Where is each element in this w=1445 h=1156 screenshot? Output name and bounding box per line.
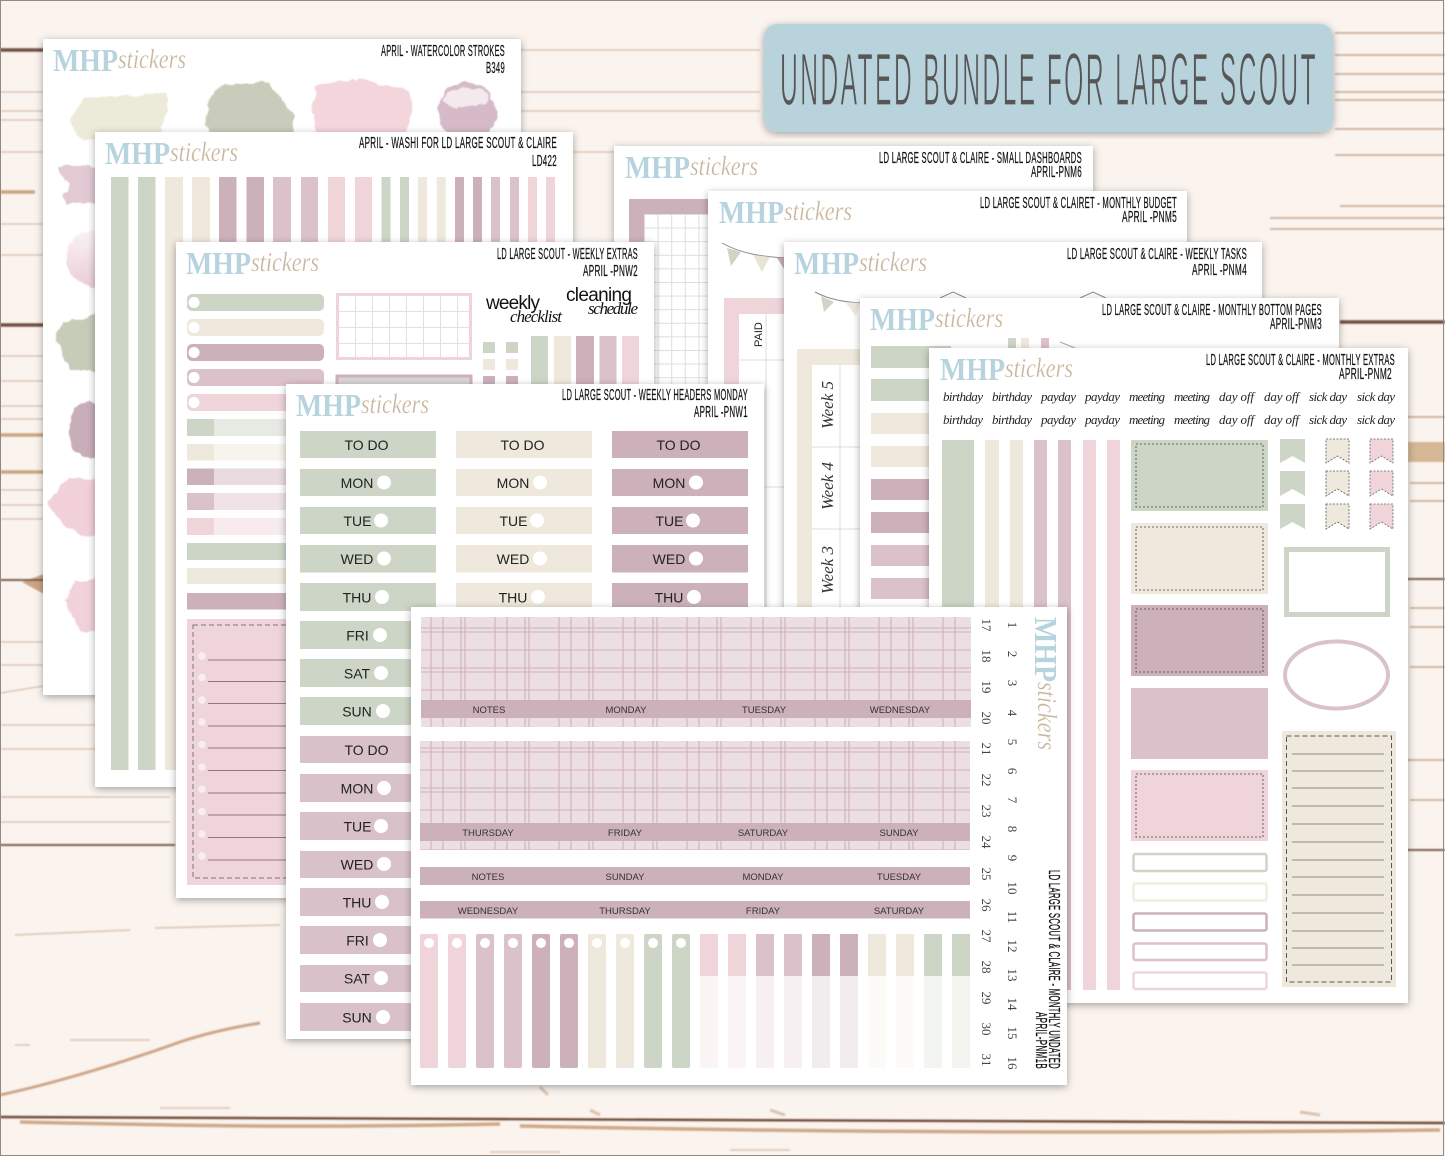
PAID label: PAID xyxy=(753,322,765,347)
mauve header column: MON xyxy=(653,475,685,491)
mauve header column: THU xyxy=(655,590,683,606)
logo: MHP stickers: stickers xyxy=(251,247,319,277)
sage and mauve header column: MON xyxy=(341,475,373,491)
sage and mauve header column: SUN xyxy=(342,704,372,720)
date numbers 17 to 31: 20 xyxy=(979,712,994,724)
date numbers 17 to 31: 24 xyxy=(979,836,994,849)
logo: MHP stickers: stickers xyxy=(935,303,1003,333)
sage and mauve header column: WED xyxy=(341,856,373,872)
dashboard grid xyxy=(629,199,1029,789)
plaid panel 2 with headers: SATURDAY xyxy=(738,828,789,839)
sheet title xyxy=(879,150,1082,181)
weekly checklist label: checklist xyxy=(510,307,563,326)
date numbers 17 to 31: 17 xyxy=(979,618,994,632)
logo: MHP stickers xyxy=(940,351,1073,387)
word stickers: payday xyxy=(1084,389,1120,404)
date numbers 17 to 31: 21 xyxy=(979,742,994,756)
date numbers 1 to 16: 4 xyxy=(1005,710,1020,717)
logo: MHP stickers: stickers xyxy=(859,247,927,277)
bunting banner xyxy=(815,292,1106,316)
cleaning schedule label xyxy=(566,285,638,318)
sheet: April watercolor strokes xyxy=(43,39,521,695)
mauve header column: WED xyxy=(653,551,685,567)
logo: MHP stickers: MHP xyxy=(719,194,784,230)
logo: MHP stickers: stickers xyxy=(118,44,186,74)
logo: MHP stickers xyxy=(794,245,927,281)
word stickers: birthday xyxy=(992,412,1032,427)
plaid panel 2 with headers: THURSDAY xyxy=(462,828,514,839)
header strip: notes to tuesday: MONDAY xyxy=(742,872,784,883)
sheet title xyxy=(562,387,748,421)
logo: MHP stickers xyxy=(296,387,429,423)
sage and mauve header column: TO DO xyxy=(344,437,389,453)
date numbers 1 to 16: 5 xyxy=(1005,739,1020,745)
tiny squares xyxy=(483,342,518,387)
cream header column: THU xyxy=(499,590,527,606)
sage and mauve header column: FRI xyxy=(346,932,369,948)
weekly checklist label xyxy=(485,293,563,326)
sage and mauve header column: THU xyxy=(343,894,371,910)
header strip: wednesday to saturday: FRIDAY xyxy=(746,906,781,917)
word stickers: payday xyxy=(1084,412,1120,427)
date numbers 1 to 16: 7 xyxy=(1005,797,1020,804)
sheet: April watercolor strokes: B349 xyxy=(486,60,505,77)
bookmark strips with holes xyxy=(420,934,690,1068)
logo: MHP stickers: MHP xyxy=(625,149,690,185)
date numbers 17 to 31: 28 xyxy=(979,960,994,974)
sage and mauve header column: TUE xyxy=(344,513,372,529)
watercolor blobs xyxy=(50,81,496,631)
sheet: monthly extras xyxy=(929,348,1408,1003)
logo: MHP stickers: MHP xyxy=(870,301,935,337)
plaid panel 2 with headers: SUNDAY xyxy=(880,828,919,839)
sheet: weekly tasks xyxy=(784,242,1262,897)
two-tone bars xyxy=(187,419,307,535)
sheet: April watercolor strokes: APRIL - WATERCOLOR STROKES xyxy=(381,43,505,60)
sheet: washi for LD large scout xyxy=(95,132,573,787)
logo: MHP stickers, rotated: stickers xyxy=(1032,682,1062,750)
cream header column: MON xyxy=(497,475,529,491)
cleaning schedule label: cleaning xyxy=(566,285,632,306)
sheet: weekly tasks: LD LARGE SCOUT & CLAIRE - WEEKLY TASKS xyxy=(1067,246,1247,263)
sage and mauve header column: WED xyxy=(341,551,373,567)
sage and mauve header column: SAT xyxy=(344,970,371,986)
sage and mauve header column: SUN xyxy=(342,1010,372,1026)
week table xyxy=(797,349,1217,879)
mauve box xyxy=(337,376,471,406)
cream header column xyxy=(456,431,592,611)
date numbers 17 to 31: 31 xyxy=(979,1054,994,1066)
date numbers 1 to 16: 15 xyxy=(1005,1026,1020,1040)
header strip: notes to tuesday xyxy=(420,867,970,885)
sheet title xyxy=(1102,302,1322,333)
logo: MHP stickers: stickers xyxy=(361,389,429,419)
sheet title xyxy=(359,135,557,170)
sheet: small dashboards: APRIL-PNM6 xyxy=(1031,164,1082,181)
logo: MHP stickers: stickers xyxy=(170,137,238,167)
sheet: monthly budget: LD LARGE SCOUT & CLAIRET - MONTHLY BUDGET xyxy=(980,195,1177,212)
sheet: weekly extras: LD LARGE SCOUT - WEEKLY EXTRAS xyxy=(497,246,638,263)
week labels: Week 5 xyxy=(818,381,837,429)
plaid panel 1 with headers: TUESDAY xyxy=(742,705,787,716)
date numbers 1 to 16: 11 xyxy=(1005,911,1020,923)
date numbers 1 to 16: 8 xyxy=(1005,826,1020,832)
sheet: monthly undated xyxy=(411,607,1067,1085)
date numbers 17 to 31: 22 xyxy=(979,774,994,786)
word stickers: meeting xyxy=(1174,412,1210,427)
plaid panel 2 with headers xyxy=(420,741,970,850)
outlined label strips xyxy=(1134,854,1266,989)
logo: MHP stickers: stickers xyxy=(784,196,852,226)
word stickers: birthday xyxy=(943,389,983,404)
header strip: wednesday to saturday: SATURDAY xyxy=(874,906,925,917)
pink grid box xyxy=(338,294,470,358)
lined note block xyxy=(1282,731,1396,987)
date numbers 1 to 16: 13 xyxy=(1005,968,1020,982)
rounded check bars xyxy=(187,294,324,411)
vertical strips xyxy=(942,440,1120,990)
logo: MHP stickers: MHP xyxy=(296,387,361,423)
two-tone tab strips xyxy=(700,934,970,1068)
date numbers 17 to 31: 18 xyxy=(979,650,994,662)
sheet: small dashboards xyxy=(614,146,1093,801)
date numbers 17 to 31: 27 xyxy=(979,930,994,943)
word stickers: birthday xyxy=(992,389,1032,404)
short strips xyxy=(531,336,639,396)
plaid panel 1 with headers: NOTES xyxy=(473,705,505,716)
logo: MHP stickers, rotated: MHP xyxy=(1028,617,1064,682)
word stickers: sick day xyxy=(1309,412,1347,427)
date numbers 17 to 31: 30 xyxy=(979,1022,994,1036)
date numbers 17 to 31: 29 xyxy=(979,992,994,1004)
oval frame xyxy=(1285,642,1388,708)
sheet title: APRIL -PNW2 xyxy=(583,263,638,280)
sheet: small dashboards: LD LARGE SCOUT & CLAIRE - SMALL DASHBOARDS xyxy=(879,150,1082,167)
sage and mauve header column: TO DO xyxy=(344,742,389,758)
date numbers 1 to 16: 10 xyxy=(1005,882,1020,894)
logo: MHP stickers xyxy=(186,245,319,281)
large blocks with stitched borders xyxy=(1131,440,1268,841)
logo: MHP stickers xyxy=(719,194,852,230)
sage and mauve header column: SAT xyxy=(344,666,371,682)
date numbers 1 to 16: 9 xyxy=(1005,855,1020,861)
logo: MHP stickers: stickers xyxy=(1005,353,1073,383)
sheet: weekly headers monday: LD LARGE SCOUT - WEEKLY HEADERS MONDAY xyxy=(562,387,748,404)
cream header column: TUE xyxy=(500,513,528,529)
sage and mauve header column: TUE xyxy=(344,818,372,834)
logo: MHP stickers: MHP xyxy=(794,245,859,281)
header strip: wednesday to saturday: THURSDAY xyxy=(599,906,651,917)
flag stickers xyxy=(1280,439,1393,529)
sage and mauve header column: MON xyxy=(341,780,373,796)
sheet title xyxy=(497,246,638,280)
mauve header column: TUE xyxy=(656,513,684,529)
logo: MHP stickers, rotated xyxy=(1028,617,1064,750)
cream header column: WED xyxy=(497,551,529,567)
date numbers 1 to 16: 12 xyxy=(1005,940,1020,952)
header strip: wednesday to saturday xyxy=(420,901,970,918)
sage and mauve header column: THU xyxy=(343,590,371,606)
sheet title: APRIL - WASHI FOR LD LARGE SCOUT & CLAIRE xyxy=(359,135,557,152)
date numbers 17 to 31: 25 xyxy=(979,868,994,880)
logo: MHP stickers xyxy=(53,42,186,78)
header strip: notes to tuesday: SUNDAY xyxy=(606,872,645,883)
sage and mauve header column: FRI xyxy=(346,628,369,644)
cleaning schedule label: schedule xyxy=(588,299,638,318)
sheet: weekly headers monday xyxy=(286,384,764,1039)
logo: MHP stickers xyxy=(625,149,758,185)
sheet: monthly bottom pages xyxy=(860,298,1339,953)
sheet title, rotated xyxy=(1032,870,1062,1069)
word stickers: payday xyxy=(1040,412,1076,427)
plaid panel 1 with headers: MONDAY xyxy=(606,705,647,716)
solid bars xyxy=(187,543,307,610)
logo: MHP stickers: stickers xyxy=(690,151,758,181)
mauve header column xyxy=(612,431,748,611)
word stickers: birthday xyxy=(943,412,983,427)
word stickers: meeting xyxy=(1129,412,1166,427)
sheet title xyxy=(980,195,1177,226)
sage frame xyxy=(1286,550,1388,614)
budget table xyxy=(724,298,1144,818)
pink lined checklist block xyxy=(187,619,324,885)
logo: MHP stickers xyxy=(870,301,1003,337)
word stickers: day off xyxy=(1264,389,1301,404)
date numbers 17 to 31: 26 xyxy=(979,898,994,912)
date numbers 17 to 31: 19 xyxy=(979,680,994,694)
sheet title xyxy=(1206,352,1395,383)
date numbers 1 to 16: 6 xyxy=(1005,768,1020,775)
title banner xyxy=(764,24,1333,132)
plaid panel 1 with headers xyxy=(421,617,971,727)
sheet: weekly headers monday: APRIL -PNW1 xyxy=(694,404,748,421)
sheet title xyxy=(381,43,505,77)
sheet title xyxy=(1067,246,1247,279)
sheet title: APRIL-PNM2 xyxy=(1339,366,1392,383)
weekly checklist label: weekly xyxy=(485,293,540,314)
sheet: washi for LD large scout: LD422 xyxy=(532,153,557,170)
logo: MHP stickers xyxy=(105,135,238,171)
cream header column: TO DO xyxy=(500,437,545,453)
word stickers: sick day xyxy=(1309,389,1347,404)
header strip: notes to tuesday: NOTES xyxy=(472,872,504,883)
sheet title, rotated: APRIL-PNM1B xyxy=(1032,1012,1049,1069)
word stickers: meeting xyxy=(1129,389,1166,404)
date numbers 1 to 16: 1 xyxy=(1005,622,1020,628)
week labels xyxy=(818,381,837,594)
date numbers 17 to 31: 23 xyxy=(979,804,994,818)
date numbers 17 to 31 xyxy=(979,618,994,1066)
date numbers 1 to 16: 14 xyxy=(1005,998,1020,1011)
word stickers: meeting xyxy=(1174,389,1210,404)
header strip: wednesday to saturday: WEDNESDAY xyxy=(458,906,519,917)
sheet: monthly budget xyxy=(708,191,1187,846)
sheet title: APRIL-PNM3 xyxy=(1270,316,1322,333)
word stickers: sick day xyxy=(1357,389,1395,404)
week labels: Week 4 xyxy=(818,462,837,510)
date numbers 1 to 16 xyxy=(1005,622,1020,1070)
logo: MHP stickers: MHP xyxy=(105,135,170,171)
word stickers xyxy=(943,389,1395,427)
date numbers 1 to 16: 16 xyxy=(1005,1056,1020,1070)
logo: MHP stickers: MHP xyxy=(940,351,1005,387)
plaid panel 1 with headers: WEDNESDAY xyxy=(870,705,931,716)
word stickers: day off xyxy=(1219,389,1256,404)
washi strips xyxy=(111,177,555,770)
word stickers: payday xyxy=(1040,389,1076,404)
date numbers 1 to 16: 2 xyxy=(1005,651,1020,657)
sheet title: APRIL -PNM4 xyxy=(1192,262,1247,279)
mauve header column: TO DO xyxy=(656,437,701,453)
word stickers: sick day xyxy=(1357,412,1395,427)
sheet title: APRIL -PNM5 xyxy=(1122,209,1177,226)
bunting banner xyxy=(722,243,790,272)
week labels: Week 3 xyxy=(818,546,837,594)
word stickers: day off xyxy=(1264,412,1301,427)
sage and mauve header column xyxy=(300,431,436,1031)
date numbers 1 to 16: 3 xyxy=(1005,680,1020,686)
logo: MHP stickers: MHP xyxy=(186,245,251,281)
header strip: notes to tuesday: TUESDAY xyxy=(877,872,922,883)
bottom bars xyxy=(871,338,1075,632)
sheet: weekly extras xyxy=(176,242,654,898)
word stickers: day off xyxy=(1219,412,1256,427)
logo: MHP stickers: MHP xyxy=(53,42,118,78)
plaid panel 2 with headers: FRIDAY xyxy=(608,828,643,839)
